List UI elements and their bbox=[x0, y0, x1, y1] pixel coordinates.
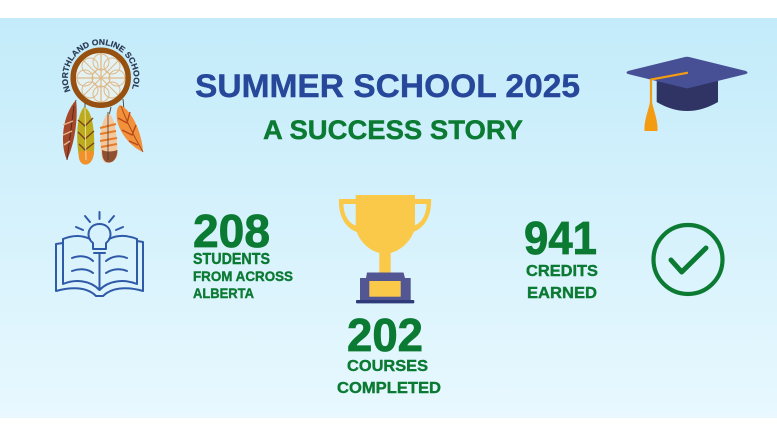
icon: graduation cap bbox=[626, 57, 748, 131]
rays bbox=[76, 212, 123, 230]
title: SUMMER SCHOOL 2025 bbox=[195, 68, 580, 104]
cap base bbox=[657, 80, 718, 111]
number: 941 bbox=[524, 212, 597, 264]
label line 2: EARNED bbox=[527, 285, 597, 302]
plate bbox=[369, 281, 401, 297]
dreamcatcher ring bbox=[73, 50, 128, 105]
feather strings bbox=[73, 99, 124, 120]
book bbox=[56, 241, 143, 296]
label line 2: FROM ACROSS bbox=[193, 268, 293, 284]
dreamcatcher interior bbox=[76, 53, 126, 103]
logo: dreamcatcher bbox=[62, 39, 144, 164]
tassel bbox=[644, 73, 688, 131]
foot bbox=[356, 300, 414, 303]
stat: 208 students bbox=[193, 205, 293, 301]
cup bbox=[356, 195, 415, 273]
feather 2 bbox=[77, 107, 94, 165]
base bbox=[360, 272, 411, 301]
bulb bbox=[89, 224, 110, 249]
label: STUDENTS bbox=[193, 251, 270, 268]
label: COURSES bbox=[347, 358, 428, 375]
feather 3 bbox=[100, 112, 118, 163]
logo arc text: NORTHLAND ONLINE SCHOOL bbox=[62, 39, 140, 92]
stat: 941 credits bbox=[524, 212, 598, 302]
number: 202 bbox=[347, 309, 423, 361]
label line 2: COMPLETED bbox=[337, 380, 441, 397]
cap board bbox=[626, 57, 748, 88]
label line 3: ALBERTA bbox=[193, 285, 254, 301]
icon: check mark circle bbox=[654, 225, 722, 294]
icon: trophy bbox=[339, 195, 431, 303]
dreamcatcher web bbox=[75, 52, 127, 104]
stat: 202 courses bbox=[337, 309, 441, 397]
feather 1 bbox=[63, 100, 77, 160]
subtitle: A SUCCESS STORY bbox=[263, 115, 523, 145]
handles bbox=[339, 199, 431, 232]
icon: book with light bulb bbox=[56, 212, 143, 296]
number: 208 bbox=[193, 205, 270, 257]
label: CREDITS bbox=[526, 263, 598, 280]
feather 4 bbox=[117, 105, 143, 152]
